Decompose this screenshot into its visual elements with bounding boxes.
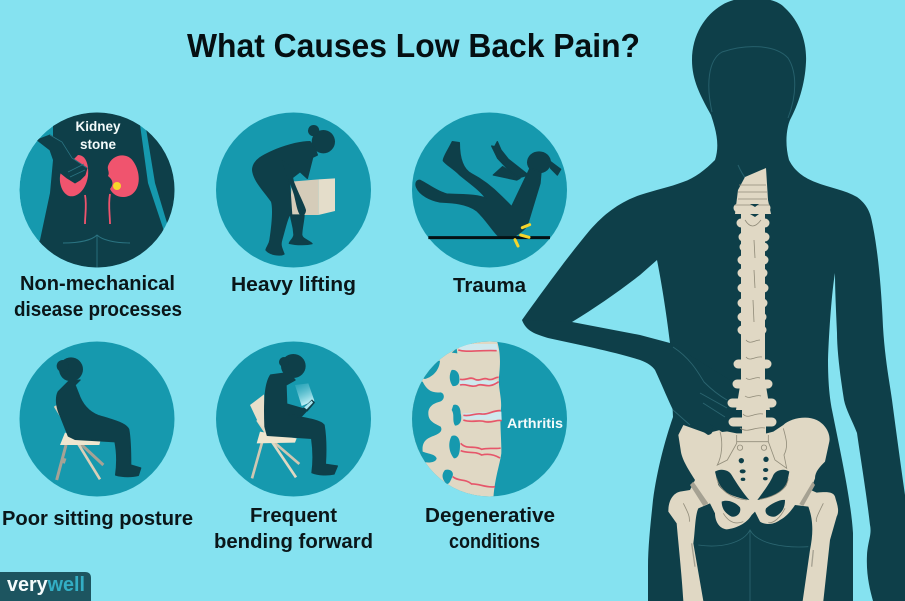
thigh lines xyxy=(698,530,808,601)
icon: arthritic spine xyxy=(400,340,567,498)
forearm and hand xyxy=(522,320,740,435)
caption: Heavy lifting xyxy=(231,274,356,296)
label: kidney stone: Kidney xyxy=(75,119,121,134)
logo: verywell: verywell xyxy=(7,574,85,596)
caption: disease processes xyxy=(14,299,182,321)
panel: non-mechanical disease processes xyxy=(14,105,185,321)
figure: woman silhouette with spine and pelvis xyxy=(522,0,905,601)
logo: verywell xyxy=(0,572,91,601)
caption: Poor sitting posture xyxy=(2,508,193,530)
icon: person lifting box xyxy=(216,112,371,268)
spine xyxy=(732,168,772,435)
panel: heavy lifting xyxy=(216,112,371,296)
panel: trauma xyxy=(412,112,567,297)
caption: Frequent xyxy=(250,505,337,527)
silhouette body xyxy=(522,0,905,601)
hand lines xyxy=(673,347,727,425)
icon: person falling xyxy=(412,112,567,268)
caption line 2: conditions xyxy=(449,531,540,553)
icon: kidney stone xyxy=(20,112,174,268)
label: arthritis: Arthritis xyxy=(507,416,563,431)
caption: Degenerative xyxy=(425,505,555,527)
icon: person bent over phone xyxy=(216,342,371,496)
panel: frequent bending forward xyxy=(214,342,373,553)
caption: Trauma xyxy=(453,275,527,297)
caption: Non-mechanical xyxy=(20,273,175,295)
panel: degenerative conditions xyxy=(412,342,567,548)
title: What Causes Low Back Pain? xyxy=(187,27,640,64)
icon: person slouching on chair xyxy=(20,342,174,496)
label: kidney stone: stone xyxy=(80,137,116,152)
panel: poor sitting posture xyxy=(2,342,193,530)
kidneys xyxy=(60,155,139,224)
pelvis and femurs xyxy=(668,418,838,601)
head outline xyxy=(709,47,795,182)
caption: bending forward xyxy=(214,531,373,553)
